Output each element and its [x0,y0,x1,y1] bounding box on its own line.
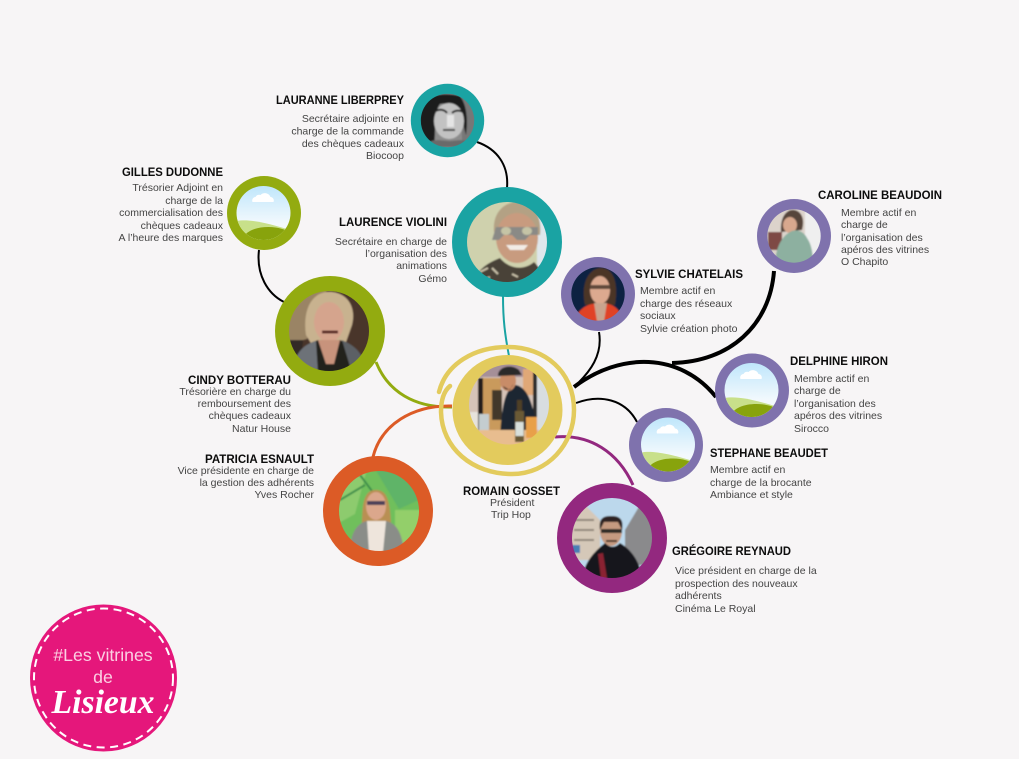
label: Romain Gosset: Président [490,497,534,509]
logo: Les vitrines de Lisieux: de [93,667,113,687]
label: Delphine Hiron: apéros des vitrines [794,410,882,422]
label: Delphine Hiron: l’organisation des [794,398,876,410]
label: Caroline Beaudoin: Membre actif en [841,207,916,219]
label: Laurence Violini: animations [396,260,447,272]
label: Sylvie Chatelais: sociaux [640,310,676,322]
connector: Patricia to Romain [373,406,452,457]
label: Cindy Botterau: chèques cadeaux [209,410,292,422]
node: Sylvie Chatelais [561,257,635,331]
connector: Sylvie to Romain [575,332,600,386]
label: Delphine Hiron [790,356,888,435]
label: Gilles Dudonne: charge de la [165,195,223,207]
label: Gilles Dudonne: commercialisation des [119,207,223,219]
connector: Stephane to Romain [576,399,637,422]
node: Stephane Beaudet [629,408,703,482]
label: Caroline Beaudoin: O Chapito [841,256,888,268]
node: Caroline Beaudoin [757,199,831,273]
label: Laurence Violini: LAURENCE VIOLINI [339,217,447,229]
label: Stephane Beaudet: Membre actif en [710,464,785,476]
label: Patricia Esnault: Yves Rocher [254,489,315,501]
connector: Gilles to Cindy [259,250,284,302]
label: Patricia Esnault [178,454,315,501]
node: Romain Gosset [439,347,574,474]
label: Gilles Dudonne: chèques cadeaux [141,220,224,232]
label: Lauranne Liberprey: Secrétaire adjointe en [302,113,404,125]
label: Lauranne Liberprey: charge de la commande [291,126,404,138]
label: Caroline Beaudoin: CAROLINE BEAUDOIN [818,190,942,202]
label: Delphine Hiron: charge de [794,385,841,397]
label: Gilles Dudonne: A l’heure des marques [119,232,223,244]
label: Caroline Beaudoin: charge de [841,219,888,231]
label: Gregoire Reynaud: GRÉGOIRE REYNAUD [672,545,791,558]
node: Cindy Botterau [275,276,385,386]
label: Cindy Botterau: remboursement des [198,398,291,410]
label: Gregoire Reynaud: Vice président en charge de la [675,565,817,577]
node: Lauranne Liberprey [411,84,484,157]
connector: Delphine to Romain [574,362,716,397]
logo: Les vitrines de Lisieux [30,604,177,752]
connector: Lauranne to Laurence [477,142,507,188]
node: Gilles Dudonne [227,176,301,250]
label: Sylvie Chatelais [635,269,743,335]
label: Gregoire Reynaud: adhérents [675,590,722,602]
label: Stephane Beaudet: Ambiance et style [710,489,793,501]
connector: Gregoire to Romain [555,437,633,485]
label: Laurence Violini: Secrétaire en charge de [335,236,447,248]
label: Cindy Botterau: Trésorière en charge du [179,386,291,398]
logo: Les vitrines de Lisieux: #Les vitrines [53,645,153,665]
label: Caroline Beaudoin: l’organisation des [841,232,923,244]
label: Delphine Hiron: Membre actif en [794,373,869,385]
label: Gilles Dudonne: GILLES DUDONNE [122,167,223,179]
label: Cindy Botterau: Natur House [232,423,291,435]
label: Patricia Esnault: Vice présidente en charge de [178,465,314,477]
label: Gilles Dudonne: Trésorier Adjoint en [132,182,223,194]
label: Stephane Beaudet: STEPHANE BEAUDET [710,448,828,460]
label: Romain Gosset: Trip Hop [491,509,531,521]
node: Gregoire Reynaud [557,483,667,593]
connector: Cindy to Romain [376,362,452,407]
label: Cindy Botterau: CINDY BOTTERAU [188,375,291,387]
label: Laurence Violini [335,217,447,285]
label: Sylvie Chatelais: Membre actif en [640,285,715,297]
label: Lauranne Liberprey: des chèques cadeaux [302,138,405,150]
node: Patricia Esnault [323,456,433,566]
label: Lauranne Liberprey: Biocoop [366,150,404,162]
label: Lauranne Liberprey [276,95,405,162]
label: Gilles Dudonne [119,167,224,244]
label: Stephane Beaudet: charge de la brocante [710,477,812,489]
label: Patricia Esnault: PATRICIA ESNAULT [205,454,314,466]
label: Sylvie Chatelais: charge des réseaux [640,298,733,310]
label: Gregoire Reynaud [672,545,817,615]
node: Delphine Hiron [715,354,789,428]
connector: Caroline branch [672,271,774,363]
label: Stephane Beaudet [710,448,828,501]
label: Cindy Botterau [179,375,292,435]
label: Romain Gosset: ROMAIN GOSSET [463,486,560,498]
node: Laurence Violini [452,187,562,297]
label: Patricia Esnault: la gestion des adhérents [200,477,314,489]
label: Sylvie Chatelais: Sylvie création photo [640,323,738,335]
label: Laurence Violini: Gémo [418,273,447,285]
label: Caroline Beaudoin [818,190,942,268]
label: Laurence Violini: l’organisation des [365,248,447,260]
label: Romain Gosset [463,486,560,521]
label: Gregoire Reynaud: prospection des nouveaux [675,578,798,590]
label: Gregoire Reynaud: Cinéma Le Royal [675,603,756,615]
logo: Les vitrines de Lisieux: Lisieux [51,684,154,721]
label: Delphine Hiron: Sirocco [794,423,829,435]
connector: Laurence to Romain [503,296,509,356]
label: Sylvie Chatelais: SYLVIE CHATELAIS [635,269,743,281]
label: Lauranne Liberprey: LAURANNE LIBERPREY [276,95,404,107]
label: Delphine Hiron: DELPHINE HIRON [790,356,888,368]
label: Caroline Beaudoin: apéros des vitrines [841,244,929,256]
